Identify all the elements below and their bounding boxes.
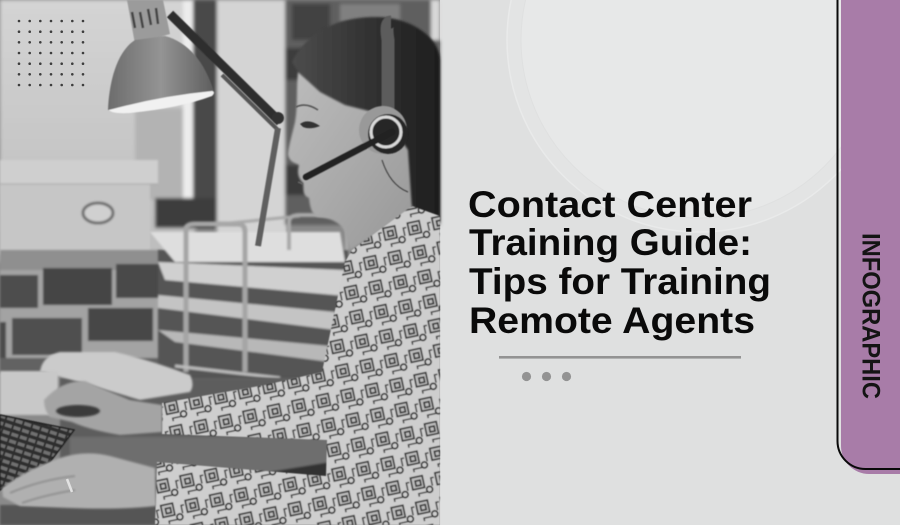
ring on finger	[67, 479, 72, 492]
title: Training Guide:	[469, 222, 752, 263]
dot grid overlay	[18, 20, 84, 86]
lower hand on keyboard	[2, 453, 156, 509]
mouse under hand	[56, 405, 100, 417]
upper hand on mouse	[44, 381, 162, 435]
desk lamp	[108, 0, 284, 246]
small box on desk	[0, 371, 58, 415]
facial features	[296, 105, 320, 184]
woman: face and neck	[288, 72, 412, 250]
three dots	[522, 372, 571, 381]
title: Tips for Training	[469, 261, 771, 302]
purple infographic tab	[838, 0, 900, 474]
tab label: INFOGRAPHIC	[856, 233, 884, 399]
storage box	[0, 160, 158, 255]
brick wall	[0, 250, 175, 375]
headset	[306, 22, 408, 192]
woman: hair	[292, 17, 440, 222]
desk surface	[0, 378, 340, 525]
photo background: wall and window	[0, 0, 440, 262]
divider line	[499, 356, 741, 359]
title: Contact Center	[468, 184, 752, 225]
decorative concentric circle	[507, 0, 891, 232]
desk organizer tray	[150, 215, 348, 380]
right panel background	[440, 0, 900, 525]
title	[468, 184, 771, 341]
title: Remote Agents	[469, 300, 755, 341]
keyboard	[0, 415, 74, 490]
telephone	[40, 352, 192, 400]
patterned shirt	[155, 206, 440, 525]
photo: agent with headset at desk	[0, 0, 440, 525]
